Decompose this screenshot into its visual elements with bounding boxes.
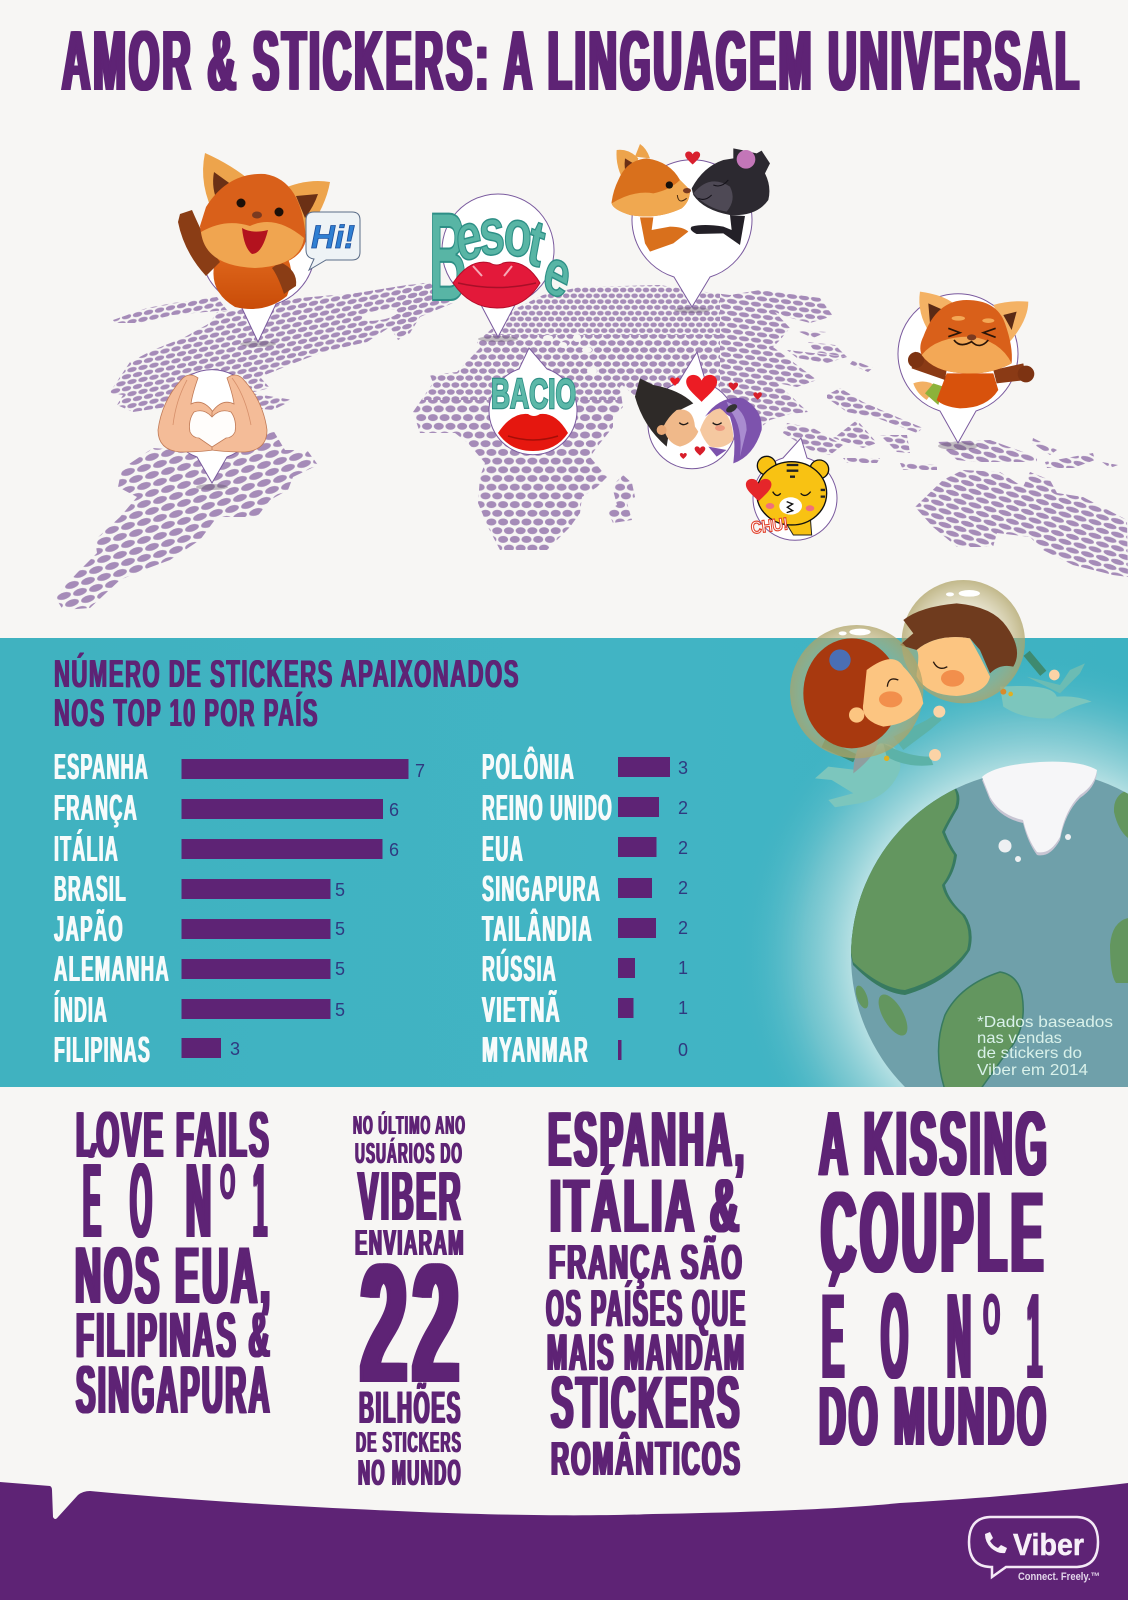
bar chart: left column: 5 — [335, 919, 345, 939]
sticker: Besote lips — [429, 188, 579, 337]
bar chart: left column: 5 — [335, 1000, 345, 1020]
sticker: waving fox with Hi bubble — [178, 153, 360, 342]
icon: phone — [985, 1532, 1007, 1553]
bar chart: left column: ESPANHA — [54, 746, 149, 787]
stat: Love Fails: É — [83, 1142, 101, 1260]
bar chart: right column: 1 — [678, 958, 688, 978]
stat: A Kissing Couple: N — [947, 1268, 971, 1404]
bar chart: right column: 2 — [678, 838, 688, 858]
text: OS PAÍSES QUE — [546, 1280, 747, 1338]
astronaut couple kissing — [790, 580, 1092, 807]
bar chart: right column: 2 — [678, 798, 688, 818]
text: 1 — [1027, 1268, 1042, 1404]
text: 22 — [361, 1229, 465, 1419]
sticker: Besote lips: esote — [451, 194, 579, 315]
text: NOS EUA, — [75, 1231, 273, 1321]
bar chart: right column: RÚSSIA — [482, 947, 557, 989]
bar chart: right column: 3 — [678, 758, 688, 778]
bar chart: right column: VIETNÃ — [482, 988, 561, 1030]
text: ESPANHA, — [548, 1095, 747, 1183]
sticker: Besote lips: B — [429, 188, 467, 327]
stat: Love Fails — [75, 1098, 273, 1428]
sticker: happy fox with open arms — [898, 292, 1034, 443]
bar chart: right column: 1 — [678, 998, 688, 1018]
sticker: heart hands — [158, 370, 267, 483]
stat: Love Fails: º — [219, 1142, 236, 1260]
sticker: tiger CHU: CHU! — [750, 513, 789, 538]
stat: 22 billion stickers: ENVIARAM — [355, 1222, 465, 1263]
bar chart: right column: 2 — [678, 918, 688, 938]
bar chart: left column: 6 — [389, 800, 399, 820]
panel heading: NÚMERO DE STICKERS APAIXONADOS — [54, 652, 520, 696]
bar chart: left column: ALEMANHA — [54, 948, 170, 989]
boy head in helmet — [900, 580, 1025, 703]
footnote: de stickers do — [977, 1045, 1082, 1062]
bar chart: left column: BRASIL — [54, 868, 127, 909]
bar chart: right column — [482, 745, 688, 1070]
girl astronaut body — [815, 706, 945, 807]
stat: Espanha, Italia e Franca: ROMÂNTICOS — [551, 1431, 742, 1486]
boy astronaut body — [1000, 653, 1092, 719]
panel: number of romantic stickers — [0, 638, 1128, 1087]
text: DE STICKERS — [356, 1427, 462, 1459]
stat: A Kissing Couple: º — [982, 1268, 1001, 1404]
dotted world map — [55, 283, 1128, 610]
footnote: *Dados baseados — [977, 1014, 1113, 1031]
bar chart: left column: 5 — [335, 880, 345, 900]
bar chart: left column: 7 — [415, 761, 425, 781]
Hi speech bubble: Hi! — [311, 219, 355, 255]
bar chart: right column: MYANMAR — [482, 1029, 589, 1070]
footnote: Viber em 2014 — [977, 1062, 1088, 1079]
bar chart: right column: TAILÂNDIA — [482, 907, 593, 949]
bar chart: right column: 2 — [678, 878, 688, 898]
Viber logo: Viber — [1013, 1527, 1084, 1562]
sticker: kissing couple — [635, 352, 762, 469]
stat: A Kissing Couple: O — [881, 1268, 908, 1404]
bar chart: left column: ITÁLIA — [54, 828, 119, 869]
bar chart: right column: EUA — [482, 828, 524, 869]
bar chart: right column: 0 — [678, 1040, 688, 1060]
text: 1 — [253, 1142, 267, 1260]
text: SINGAPURA — [76, 1352, 272, 1428]
panel heading: NOS TOP 10 POR PAÍS — [54, 691, 319, 735]
bar chart: left column: FRANÇA — [54, 787, 138, 828]
stat: Love Fails: O — [130, 1142, 152, 1260]
bar chart: right column: SINGAPURA — [482, 868, 601, 909]
bar chart: left column: 3 — [230, 1039, 240, 1059]
text: FILIPINAS & — [76, 1299, 272, 1371]
text: STICKERS — [551, 1361, 742, 1444]
Hi speech bubble — [306, 212, 360, 270]
stat: 22 billion stickers — [353, 1110, 466, 1493]
footnote: nas vendas — [977, 1030, 1062, 1047]
text: VIBER — [358, 1157, 463, 1235]
Viber logo: Connect. Freely.™ — [1018, 1571, 1100, 1583]
stat: Love Fails: N — [186, 1142, 211, 1260]
bar chart: left column: ÍNDIA — [54, 989, 108, 1030]
text: LOVE FAILS — [76, 1098, 271, 1171]
Viber logo — [969, 1517, 1100, 1583]
bar chart: right column: POLÔNIA — [482, 745, 575, 787]
planet earth with glow — [764, 682, 1128, 1087]
sticker: Bacio lips: BACIO — [491, 370, 576, 417]
footnote — [977, 1014, 1113, 1079]
stat: A Kissing Couple — [819, 1093, 1050, 1463]
bar chart: left column: 6 — [389, 840, 399, 860]
sticker: Bacio lips — [489, 348, 577, 455]
stat: Espanha, Italia e Franca — [546, 1095, 747, 1486]
text: NO MUNDO — [358, 1452, 462, 1493]
panel heading — [54, 652, 520, 735]
text: MAIS MANDAM — [547, 1324, 746, 1382]
sticker: tiger CHU — [746, 438, 837, 540]
footer band — [0, 1482, 1128, 1600]
stat: Espanha, Italia e Franca: ITÁLIA & — [550, 1164, 742, 1249]
bar chart: right column: REINO UNIDO — [482, 787, 613, 828]
text: USUÁRIOS DO — [355, 1136, 463, 1170]
pin shadows — [196, 307, 978, 490]
girl head in helmet — [790, 625, 923, 758]
sticker: fox and black cat kissing — [612, 144, 770, 307]
bar chart: left column: JAPÃO — [54, 907, 124, 949]
stat: A Kissing Couple: É — [822, 1268, 844, 1404]
stat: Espanha, Italia e Franca: FRANÇA SÃO — [549, 1236, 744, 1290]
bar chart: left column — [54, 746, 425, 1070]
text: BILHÕES — [359, 1382, 462, 1433]
text: NO ÚLTIMO ANO — [353, 1110, 466, 1140]
bar chart: left column: FILIPINAS — [54, 1029, 151, 1070]
bar chart: left column: 5 — [335, 959, 345, 979]
